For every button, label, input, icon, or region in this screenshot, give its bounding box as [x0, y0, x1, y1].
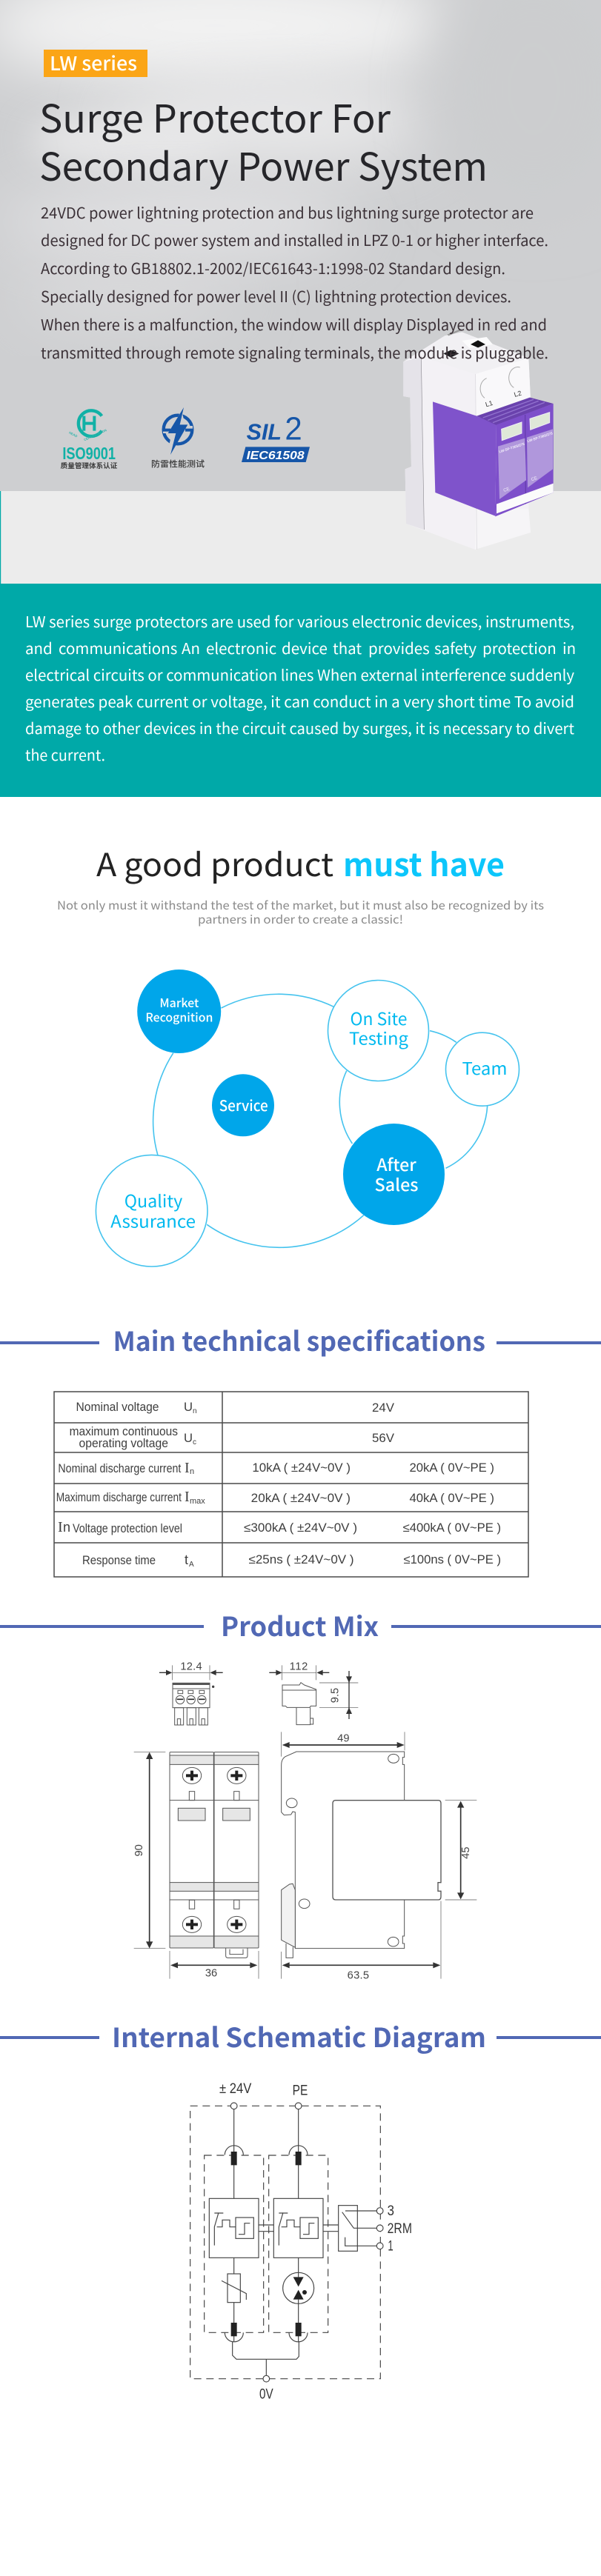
bubble: team: Team: [462, 1055, 507, 1080]
hero background: [0, 0, 601, 584]
product photo: purple surge protector module: L2: [513, 390, 522, 398]
bubble: on site testing: On Site: [350, 1005, 408, 1030]
row: maximum continuous operating voltage: operating voltage: [79, 1437, 168, 1450]
drawing: module side view: [282, 1732, 477, 1982]
terminal labels: 2RM: [388, 2221, 412, 2237]
screw terminals: [182, 1767, 246, 1932]
teal panel text: electronic: [206, 636, 276, 658]
bubble: after sales: [343, 1124, 445, 1225]
intro paragraph: transmitted through remote signaling terminals, the module is pluggable.: [41, 341, 548, 363]
icon: SIL2 IEC61508: SIL: [247, 419, 282, 444]
row: maximum discharge current: [56, 1489, 494, 1506]
product photo: purple surge protector module: CE: [503, 487, 511, 493]
teal panel text: that: [333, 636, 362, 658]
icon: SIL2 IEC61508: IEC61508: [247, 450, 305, 462]
internal schematic diagram: [190, 2081, 412, 2402]
drawing: terminal front: 12.4: [180, 1661, 202, 1672]
row: nominal voltage: Nominal voltage: [76, 1401, 159, 1414]
bubble: service: [212, 1074, 274, 1136]
row: voltage protection level: I: [58, 1519, 63, 1535]
drawing: terminal front: [159, 1661, 223, 1725]
terminal labels: 1: [388, 2238, 394, 2254]
bubble: after sales: After: [376, 1151, 416, 1176]
bubble: quality assurance: [96, 1155, 207, 1267]
drawing: module side view: 45: [460, 1847, 472, 1859]
teal panel text: communications: [59, 636, 177, 658]
varistor: [222, 2274, 246, 2303]
teal panel text: LW series surge protectors are used for various electronic devices, instruments,: [25, 610, 574, 632]
teal panel text: electrical circuits or communication lines When external interference suddenly: [25, 663, 574, 685]
heading: internal schematic diagram: Internal Schematic Diagram: [112, 2017, 486, 2055]
drawing: module front view: [133, 1752, 259, 1979]
row: maximum continuous operating voltage: c: [193, 1438, 196, 1447]
bubble diagram: [96, 970, 519, 1267]
bubble: after sales: Sales: [375, 1171, 418, 1196]
bubble: team: [446, 1032, 519, 1106]
subheading: partners in order to create a classic!: [198, 911, 403, 927]
series badge: LW series: [50, 49, 137, 76]
teal panel text: in: [562, 636, 576, 658]
terminal labels: ± 24V: [219, 2081, 251, 2097]
row: voltage protection level: n: [63, 1520, 70, 1535]
gas discharge tube: [283, 2272, 314, 2303]
heading: product mix: [0, 1606, 601, 1644]
intro paragraph: 24VDC power lightning protection and bus lightning surge protector are: [41, 201, 534, 223]
row: nominal discharge current: [58, 1460, 494, 1476]
row: maximum discharge current: I: [185, 1489, 190, 1505]
row: maximum continuous operating voltage: U: [184, 1431, 193, 1445]
terminal labels: 0V: [259, 2386, 273, 2402]
row: response time: t: [185, 1552, 188, 1567]
row: voltage protection level: Voltage protection level: [73, 1522, 182, 1535]
icon: ISO9001 certification: 质量管理体系认证: [61, 460, 118, 470]
icon: ISO9001 certification: CERTIFICATION: [83, 428, 107, 441]
icon: ISO9001 certification: HEAD: [68, 430, 78, 438]
heading: main technical specifications: Main technical specifications: [113, 1321, 485, 1359]
drawing: module front view: 36: [205, 1967, 217, 1979]
row: maximum discharge current: max: [190, 1497, 205, 1506]
title: Surge Protector For: [39, 88, 391, 144]
drawing: terminal side: [269, 1661, 358, 1725]
bubble: on site testing: Testing: [349, 1025, 408, 1050]
bubble: market recognition: Recognition: [145, 1007, 213, 1025]
row: response time: A: [189, 1561, 194, 1569]
heading: a good product must have: A good product: [96, 840, 333, 886]
drawing: terminal side: 112: [290, 1661, 308, 1672]
title: Secondary Power System: [39, 136, 488, 192]
drawing: module side view: 63.5: [348, 1970, 369, 1982]
thermal disconnect boxes: [209, 2198, 339, 2258]
teal panel text: the current.: [25, 743, 105, 765]
icon: lightning protection test: 防雷性能测试: [151, 458, 205, 470]
intro paragraph: Specially designed for power level II (C) lightning protection devices.: [41, 284, 511, 307]
row: nominal discharge current: 10kA ( ±24V~0V ): [252, 1461, 351, 1475]
row: maximum discharge current: 40kA ( 0V~PE ): [409, 1492, 494, 1505]
teal panel text: device: [282, 636, 328, 658]
teal panel text: [25, 610, 576, 765]
subheading: Not only must it withstand the test of the market, but it must also be recognized by its: [57, 897, 544, 913]
certification logos: [61, 407, 310, 470]
icon: SIL2 IEC61508: [242, 411, 310, 462]
wiring and plug contacts: [225, 2103, 308, 2382]
icon: SIL2 IEC61508: 2: [285, 411, 302, 447]
row: nominal voltage: [76, 1400, 395, 1415]
product photo: purple surge protector module: LW-SP-T365/275: [527, 431, 554, 443]
row: voltage protection level: ≤300kA ( ±24V~0V ): [244, 1521, 357, 1535]
title: [39, 88, 488, 192]
terminal labels: [219, 2081, 412, 2402]
intro paragraph: When there is a malfunction, the window will display Displayed in red and: [41, 313, 547, 335]
row: response time: [82, 1552, 501, 1569]
heading: main technical specifications: [0, 1321, 601, 1359]
icon: ISO9001 certification: ISO9001: [62, 444, 116, 463]
bubble: quality assurance: Assurance: [110, 1207, 196, 1232]
teal panel text: safety: [434, 636, 477, 658]
panel: teal description: [0, 584, 601, 797]
row: voltage protection level: ≤400kA ( 0V~PE ): [403, 1521, 501, 1535]
heading: internal schematic diagram: [0, 2017, 601, 2055]
icon: ISO9001 certification: [61, 410, 118, 470]
row: voltage protection level: [58, 1519, 501, 1535]
product photo: purple surge protector module: CE: [531, 476, 538, 482]
row: nominal voltage: 24V: [372, 1401, 395, 1415]
specifications table: [54, 1392, 528, 1577]
subheading: [57, 897, 544, 927]
product photo: purple surge protector module: L1: [485, 399, 494, 408]
bubble: on site testing: [328, 981, 428, 1081]
teal panel text: damage to other devices in the circuit caused by surges, it is necessary to divert: [25, 716, 574, 738]
row: nominal voltage: n: [193, 1407, 197, 1415]
drawing: module front view: 90: [133, 1844, 145, 1856]
row: maximum continuous operating voltage: 56V: [372, 1431, 395, 1445]
remote signalling relay: [339, 2206, 383, 2251]
teal panel text: and: [25, 636, 53, 658]
intro paragraph: [41, 201, 548, 363]
row: response time: ≤25ns ( ±24V~0V ): [249, 1553, 354, 1566]
row: nominal discharge current: Nominal discharge current: [58, 1462, 182, 1475]
teal panel text: generates peak current or voltage, it can conduct in a very short time To avoid: [25, 690, 574, 712]
bubble: quality assurance: Quality: [124, 1187, 182, 1212]
row: maximum discharge current: 20kA ( ±24V~0V ): [251, 1492, 351, 1505]
row: nominal discharge current: 20kA ( 0V~PE ): [409, 1461, 494, 1475]
teal panel text: provides: [368, 636, 430, 658]
icon: lightning protection test: [151, 407, 205, 470]
heading: product mix: Product Mix: [221, 1606, 379, 1644]
drawing: terminal side: 9.5: [329, 1688, 341, 1703]
intro paragraph: According to GB18802.1-2002/IEC61643-1:1998-02 Standard design.: [41, 256, 505, 278]
row: nominal discharge current: n: [190, 1467, 194, 1476]
row: maximum continuous operating voltage: maximum continuous: [70, 1425, 178, 1438]
terminal labels: 3: [388, 2203, 394, 2219]
bubble: market recognition: [137, 970, 221, 1053]
intro paragraph: designed for DC power system and installed in LPZ 0-1 or higher interface.: [41, 228, 548, 250]
bubble: market recognition: Market: [159, 993, 199, 1011]
row: nominal voltage: U: [184, 1400, 193, 1414]
bubble: service: Service: [219, 1094, 268, 1115]
heading: a good product must have: must have: [343, 840, 505, 886]
terminal labels: PE: [293, 2083, 308, 2098]
teal panel text: protection: [482, 636, 557, 658]
enclosure dashed outline: [190, 2106, 380, 2379]
row: response time: ≤100ns ( 0V~PE ): [403, 1553, 501, 1566]
row: response time: Response time: [82, 1554, 156, 1567]
dimension drawings: [133, 1661, 477, 1982]
row: maximum discharge current: Maximum discharge current: [56, 1491, 182, 1504]
teal panel text: An: [182, 636, 200, 658]
product photo: purple surge protector module: [403, 329, 554, 550]
heading: a good product must have: [96, 840, 505, 886]
row: maximum continuous operating voltage: [70, 1425, 395, 1450]
drawing: module side view: 49: [337, 1733, 349, 1745]
row: nominal discharge current: I: [185, 1460, 190, 1476]
product photo: purple surge protector module: LW-SP-T365/275: [499, 442, 525, 454]
